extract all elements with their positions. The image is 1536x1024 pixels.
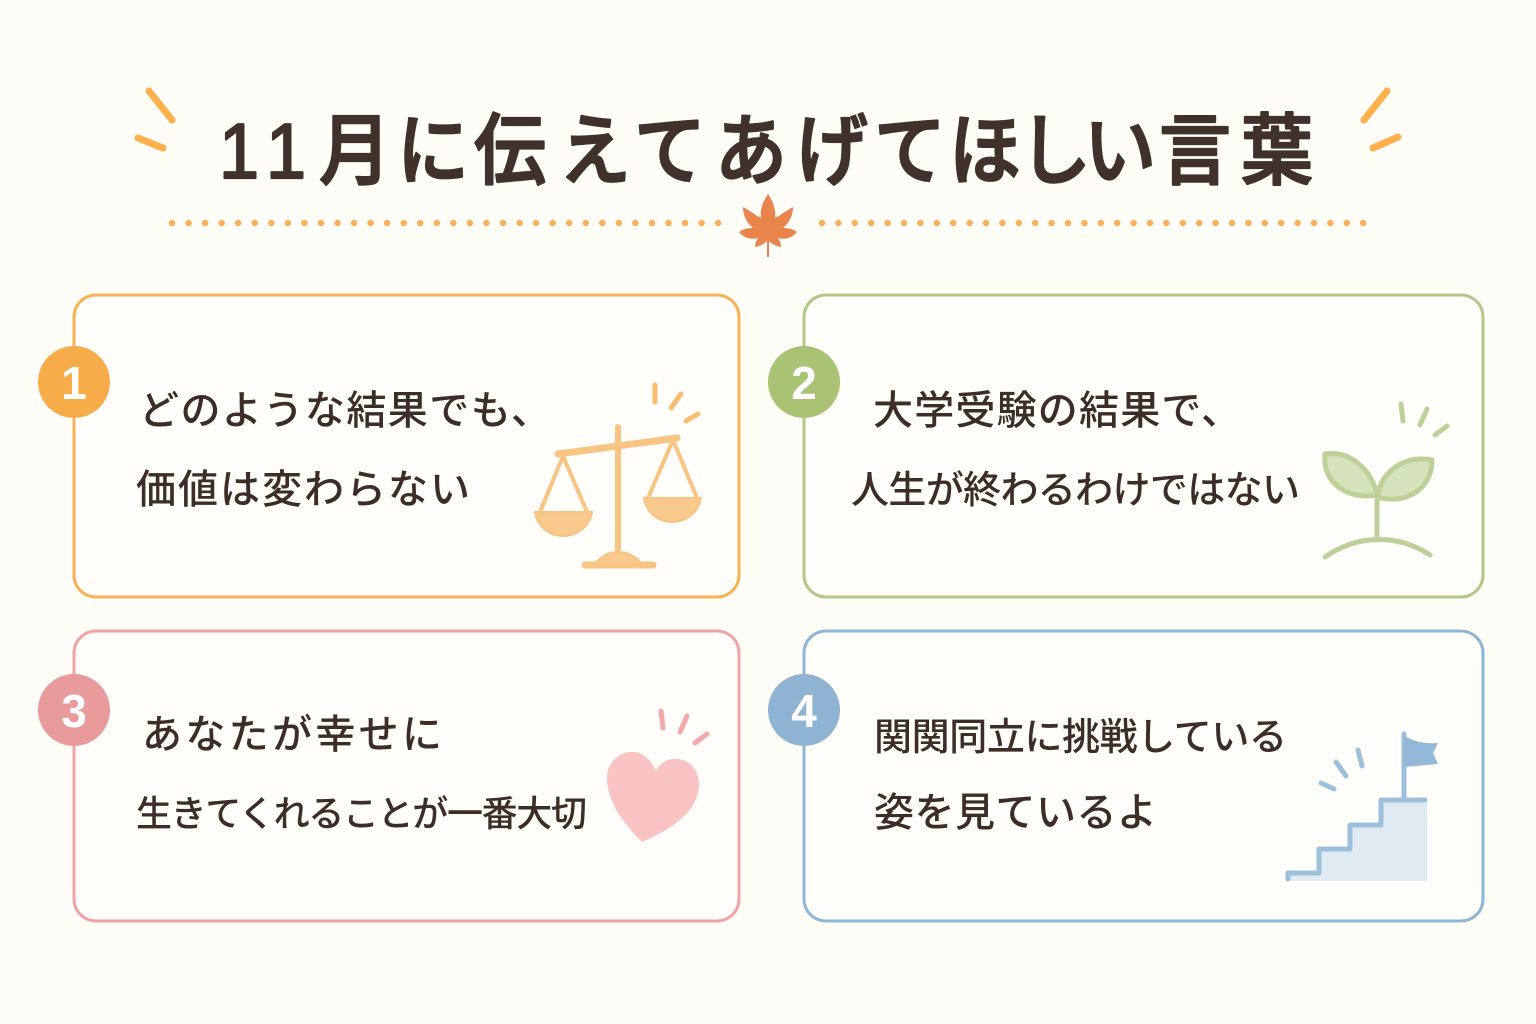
badge 4: 4 [791,685,817,737]
text: card 4 message [874,717,1287,835]
text: card 3 message [136,713,587,834]
text: card 2 message [851,389,1300,512]
badge 3: 3 [61,685,87,737]
panel: card 1 [38,295,739,597]
text: card 2 message: 人生が終わるわけではない [851,470,1300,512]
text: card 3 message: 生きてくれることが一番大切 [136,793,587,834]
icon: maple leaf [739,194,797,257]
badge 1 [38,346,110,418]
icon: left title sparkles [138,91,172,148]
title: 11月に伝えてあげてほしい言葉 [219,107,1313,195]
icon: right title sparkles [1364,91,1398,148]
icon: sprout [1325,404,1447,557]
badge 3 [38,674,110,746]
text: card 4 message: 関関同立に挑戦している [874,717,1287,759]
icon: heart [607,711,707,842]
text: card 1 message: どのような結果でも、 [139,389,551,433]
badge 2 [768,346,840,418]
dotted divider left [172,220,719,226]
text: card 4 message: 姿を見ているよ [874,791,1157,835]
text: card 1 message [136,389,551,512]
panel: card 3 [38,631,739,921]
panel: card 2 [768,295,1483,597]
text: card 2 message: 大学受験の結果で、 [873,389,1241,433]
dotted divider right [822,220,1365,226]
badge 4 [768,674,840,746]
badge 1: 1 [61,357,87,409]
text: card 3 message: あなたが幸せに [142,713,442,757]
badge 2: 2 [791,357,817,409]
text: card 1 message: 価値は変わらない [136,468,470,512]
panel: card 4 [768,631,1483,921]
icon: balance scale [535,385,701,565]
icon: stairs and flag [1288,734,1438,881]
